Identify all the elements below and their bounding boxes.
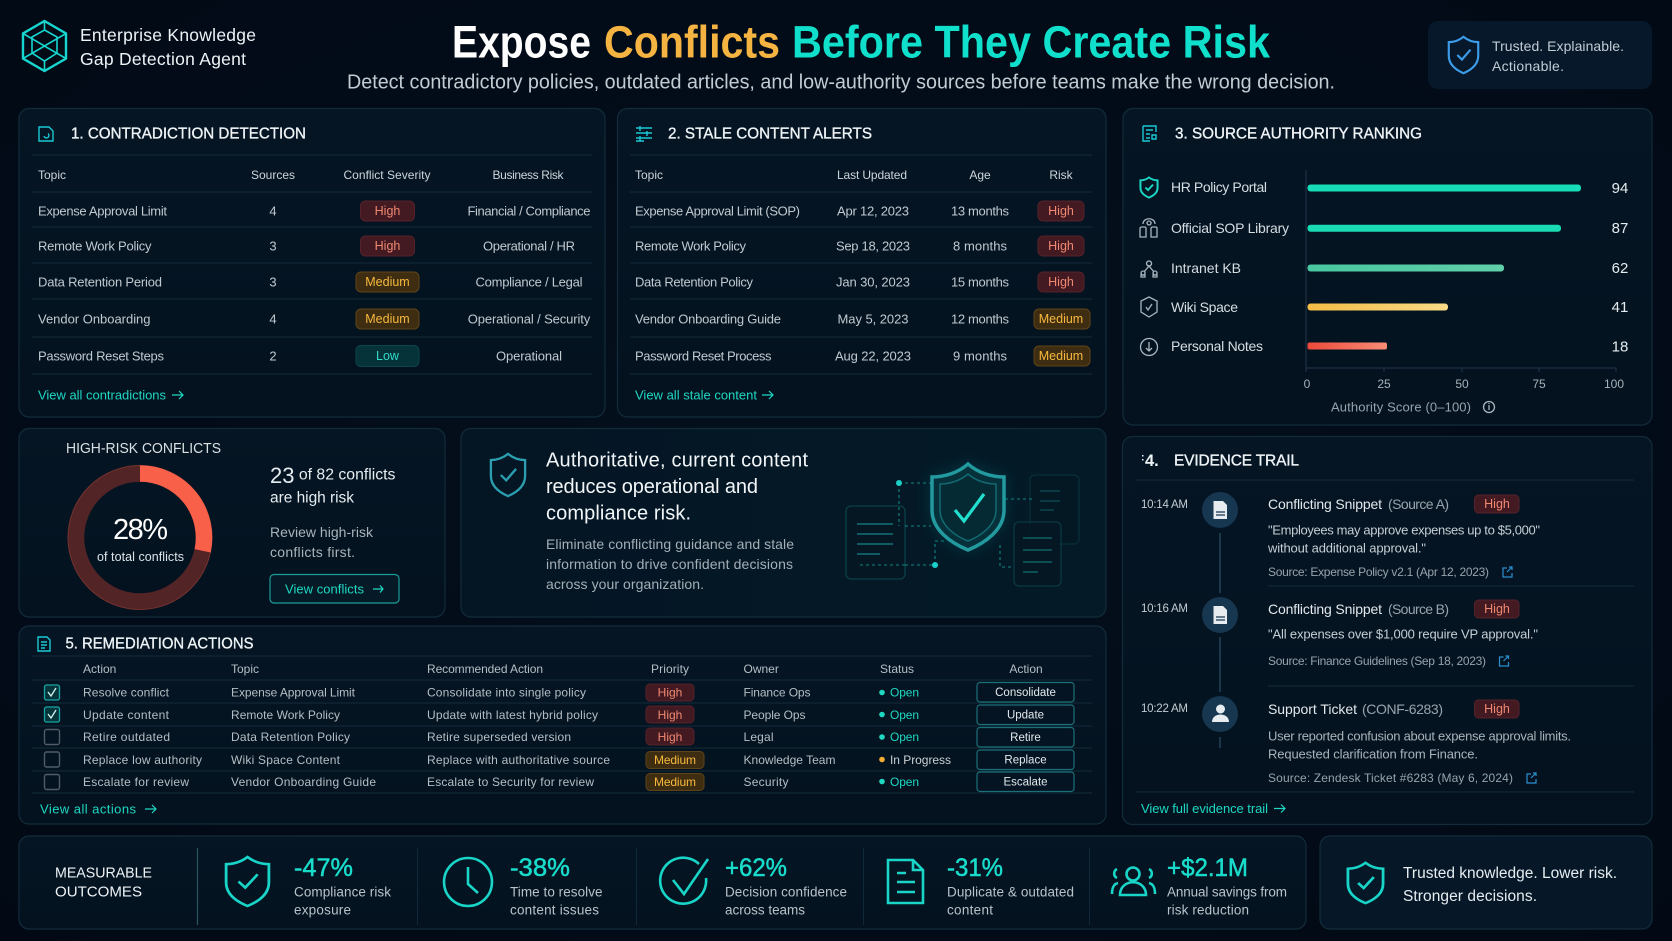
outcome: compliance risk: Compliance risk bbox=[294, 884, 391, 900]
outcome: duplicate content: content bbox=[947, 902, 993, 918]
row: escalate for review bbox=[44, 772, 1074, 792]
evidence: support ticket: User reported confusion about expense approval limits. bbox=[1268, 728, 1571, 744]
row: replace low authority: Replace with authoritative source bbox=[427, 753, 610, 767]
table header: Action bbox=[1009, 662, 1043, 676]
heading: 5. REMEDIATION ACTIONS bbox=[66, 636, 254, 652]
outcome: time to resolve: Time to resolve bbox=[510, 884, 602, 900]
row: remote work policy: High bbox=[375, 239, 400, 253]
statement text: Stronger decisions. bbox=[1403, 888, 1537, 905]
heading: 2. STALE CONTENT ALERTS bbox=[668, 126, 872, 142]
row: retire outdated: Open bbox=[890, 730, 919, 744]
source: HR Policy Portal: 94 bbox=[1612, 180, 1628, 197]
table header bbox=[38, 168, 564, 182]
badge: trusted: Trusted. Explainable. bbox=[1492, 38, 1624, 54]
link: View all contradictions bbox=[38, 388, 166, 402]
row: Data Retention Policy bbox=[635, 274, 754, 290]
table header bbox=[635, 168, 1074, 182]
message body bbox=[546, 536, 794, 592]
row: Jan 30, 2023 bbox=[836, 274, 910, 290]
title: Conflicts bbox=[604, 16, 780, 68]
message body: information to drive confident decisions bbox=[546, 556, 793, 572]
stat text: are high risk bbox=[270, 490, 354, 506]
message body: across your organization. bbox=[546, 576, 704, 592]
outcome: decision confidence: across teams bbox=[725, 902, 805, 918]
heading: 3. SOURCE AUTHORITY RANKING bbox=[1175, 126, 1422, 142]
title: Expose bbox=[452, 16, 591, 68]
table header: Risk bbox=[1049, 168, 1074, 182]
icon: shield bbox=[1348, 863, 1383, 903]
source: Official SOP Library: Official SOP Library bbox=[1171, 220, 1289, 236]
outcome: time to resolve bbox=[444, 854, 602, 918]
row: 9 months bbox=[953, 348, 1008, 364]
donut chart: of total conflicts bbox=[97, 550, 184, 564]
donut chart bbox=[68, 466, 212, 610]
heading: EVIDENCE TRAIL bbox=[1174, 452, 1299, 470]
row: retire outdated: Legal bbox=[744, 730, 774, 744]
row: replace low authority: Knowledge Team bbox=[744, 753, 836, 767]
panel: contradiction detection bbox=[19, 108, 605, 417]
table header: Last Updated bbox=[837, 168, 907, 182]
outcome: annual savings bbox=[1112, 854, 1287, 918]
label bbox=[55, 864, 152, 900]
row: Sep 18, 2023 bbox=[836, 238, 910, 254]
source: Personal Notes bbox=[1140, 338, 1628, 356]
table header: Topic bbox=[635, 168, 663, 182]
row: expense approval limit bbox=[38, 201, 590, 221]
row: 12 months bbox=[951, 312, 1010, 326]
icon: list bbox=[1143, 126, 1156, 141]
icon: shield bbox=[491, 454, 525, 496]
row: remote work policy bbox=[38, 236, 575, 256]
message heading bbox=[546, 450, 808, 524]
panel: source authority ranking bbox=[1123, 108, 1652, 425]
source: Wiki Space: 41 bbox=[1612, 299, 1628, 316]
evidence: source A: High bbox=[1484, 497, 1510, 511]
evidence: source B: 10:16 AM bbox=[1141, 603, 1188, 615]
source: Wiki Space bbox=[1141, 297, 1628, 317]
panel: high-risk conflicts bbox=[19, 428, 445, 617]
row: update content: Update with latest hybrid policy bbox=[427, 708, 598, 722]
row: Medium bbox=[1039, 312, 1083, 326]
outcome: compliance risk: exposure bbox=[294, 902, 351, 918]
row: resolve conflict: Open bbox=[890, 686, 919, 700]
evidence: source B: (Source B) bbox=[1388, 601, 1449, 617]
panel: evidence trail bbox=[1122, 436, 1652, 824]
row: retire outdated: High bbox=[658, 730, 682, 744]
evidence: source B: Conflicting Snippet bbox=[1268, 601, 1382, 617]
row: update content bbox=[44, 705, 1074, 724]
row: Medium bbox=[1039, 349, 1083, 363]
row: vendor onboarding: 4 bbox=[269, 312, 277, 326]
row: remote work policy: Remote Work Policy bbox=[38, 238, 152, 254]
row: data retention period bbox=[38, 272, 583, 292]
logo text bbox=[80, 25, 256, 69]
logo icon bbox=[23, 21, 66, 71]
outcome: duplicate content: Duplicate & outdated bbox=[947, 884, 1074, 900]
icon: sliders bbox=[636, 126, 652, 141]
evidence: support ticket: 10:22 AM bbox=[1141, 703, 1188, 715]
link: View full evidence trail bbox=[1141, 801, 1268, 816]
heading: HIGH-RISK CONFLICTS bbox=[66, 441, 221, 457]
icon: document bbox=[38, 637, 50, 651]
heading: 1. CONTRADICTION DETECTION bbox=[71, 126, 306, 142]
title bbox=[452, 16, 1271, 68]
row: Remote Work Policy bbox=[635, 238, 746, 254]
title: Before They Create Risk bbox=[792, 16, 1271, 68]
source: Wiki Space: Wiki Space bbox=[1171, 299, 1238, 315]
axis labels: Authority Score (0–100) bbox=[1331, 400, 1471, 414]
row: Vendor Onboarding Guide bbox=[635, 312, 781, 326]
row: password reset steps: Operational bbox=[496, 348, 562, 364]
row: retire outdated: Retire outdated bbox=[83, 730, 170, 744]
evidence: source A: Source: Expense Policy v2.1 (Apr 12, 2023) bbox=[1268, 565, 1489, 579]
stat text: 23 of 82 conflicts bbox=[270, 462, 396, 488]
row: update content: Update content bbox=[83, 708, 170, 722]
outcome: decision confidence: +62% bbox=[725, 854, 787, 882]
panel: closing statement bbox=[1320, 836, 1652, 929]
row: 15 months bbox=[951, 274, 1010, 290]
row: expense approval limit: 4 bbox=[269, 204, 277, 218]
button: View conflicts bbox=[285, 582, 364, 596]
link: View all actions bbox=[40, 802, 136, 816]
row: replace low authority: In Progress bbox=[890, 753, 951, 767]
row: password reset steps: Password Reset Steps bbox=[38, 348, 164, 364]
row: escalate for review: Escalate for review bbox=[83, 775, 189, 789]
row: escalate for review: Medium bbox=[654, 775, 696, 789]
row: vendor onboarding: Operational / Security bbox=[468, 312, 591, 326]
heading: 4. bbox=[1145, 452, 1159, 470]
stat text bbox=[270, 462, 396, 560]
subtitle: Detect contradictory policies, outdated articles, and low-authority sources before teams make the wrong decision. bbox=[347, 70, 1335, 94]
row: escalate for review: Open bbox=[890, 775, 919, 789]
row: resolve conflict: Finance Ops bbox=[744, 686, 810, 700]
row bbox=[635, 236, 1084, 256]
donut chart: 28% bbox=[113, 514, 168, 546]
evidence: source B: Source: Finance Guidelines (Sep 18, 2023) bbox=[1268, 654, 1486, 668]
source: Intranet KB: Intranet KB bbox=[1171, 260, 1241, 276]
row: 13 months bbox=[951, 204, 1010, 218]
label: OUTCOMES bbox=[55, 884, 142, 900]
row: update content: People Ops bbox=[744, 708, 806, 722]
row: escalate for review: Escalate bbox=[1003, 776, 1048, 788]
row: vendor onboarding: Medium bbox=[365, 312, 410, 326]
row bbox=[635, 201, 1084, 221]
row: 8 months bbox=[953, 238, 1008, 254]
row: update content: Open bbox=[890, 708, 919, 722]
row: replace low authority: Medium bbox=[654, 753, 696, 767]
row: replace low authority: Replace bbox=[1004, 754, 1047, 766]
outcome: duplicate content bbox=[888, 854, 1074, 918]
source: Intranet KB bbox=[1141, 260, 1628, 277]
row: data retention period: Data Retention Period bbox=[38, 274, 162, 290]
evidence: source B: High bbox=[1484, 602, 1510, 616]
table header: Age bbox=[969, 168, 991, 182]
row: vendor onboarding bbox=[38, 309, 591, 329]
table header: Topic bbox=[38, 168, 66, 182]
axis labels bbox=[1304, 377, 1624, 414]
panel: remediation actions bbox=[19, 626, 1106, 824]
row: High bbox=[1048, 204, 1074, 218]
row: update content: Remote Work Policy bbox=[231, 708, 340, 722]
table header: Sources bbox=[251, 168, 295, 182]
outcome: annual savings: risk reduction bbox=[1167, 902, 1249, 918]
row: May 5, 2023 bbox=[838, 312, 908, 326]
row: remote work policy: 3 bbox=[269, 238, 277, 254]
row bbox=[635, 346, 1090, 366]
row: password reset steps: 2 bbox=[269, 348, 277, 364]
row: password reset steps: Low bbox=[376, 349, 400, 363]
row: data retention period: Medium bbox=[365, 275, 410, 289]
outcome: annual savings: Annual savings from bbox=[1167, 884, 1287, 900]
row: resolve conflict: Consolidate bbox=[995, 687, 1056, 699]
panel: stale content alerts bbox=[618, 108, 1106, 417]
table header: Conflict Severity bbox=[344, 168, 430, 182]
row: password reset steps bbox=[38, 346, 562, 366]
stat text: conflicts first. bbox=[270, 544, 355, 560]
illustration: shield and documents bbox=[846, 462, 1079, 586]
row: escalate for review: Vendor Onboarding Guide bbox=[231, 775, 376, 789]
table header: Business Risk bbox=[492, 168, 564, 182]
panel: key message bbox=[461, 428, 1106, 617]
badge: trusted: Actionable. bbox=[1492, 58, 1564, 74]
evidence: support ticket: (CONF-6283) bbox=[1362, 701, 1443, 717]
source: Intranet KB: 62 bbox=[1612, 260, 1628, 277]
source: Personal Notes: Personal Notes bbox=[1171, 338, 1263, 354]
evidence: source A: Conflicting Snippet bbox=[1268, 496, 1382, 512]
panel: measurable outcomes bbox=[19, 836, 1306, 929]
outcome: time to resolve: -38% bbox=[510, 854, 570, 882]
outcome: annual savings: +$2.1M bbox=[1167, 854, 1248, 882]
badge: trusted bbox=[1428, 21, 1652, 89]
row: resolve conflict: Expense Approval Limit bbox=[231, 686, 356, 700]
row: resolve conflict: Resolve conflict bbox=[83, 686, 170, 700]
row: escalate for review: Escalate to Security for review bbox=[427, 775, 594, 789]
row: High bbox=[1048, 239, 1074, 253]
outcome: decision confidence bbox=[660, 854, 847, 918]
row: update content: Update bbox=[1007, 709, 1044, 721]
table header: Status bbox=[880, 662, 914, 676]
evidence: support ticket bbox=[1141, 696, 1571, 785]
evidence: source A: (Source A) bbox=[1388, 496, 1449, 512]
row: resolve conflict: Consolidate into single policy bbox=[427, 686, 586, 700]
row: vendor onboarding: Vendor Onboarding bbox=[38, 312, 150, 326]
row: resolve conflict bbox=[44, 682, 1074, 702]
axis labels: 75 bbox=[1532, 377, 1546, 391]
evidence: support ticket: High bbox=[1484, 702, 1510, 716]
label: MEASURABLE bbox=[55, 864, 152, 882]
source: Official SOP Library bbox=[1140, 219, 1628, 237]
row: expense approval limit: Expense Approval Limit bbox=[38, 204, 167, 218]
outcome: compliance risk bbox=[226, 854, 391, 918]
row: update content: High bbox=[658, 708, 682, 722]
row: High bbox=[1048, 275, 1074, 289]
row bbox=[635, 272, 1084, 292]
row: expense approval limit: Financial / Compliance bbox=[468, 204, 590, 218]
table header: Recommended Action bbox=[427, 662, 543, 676]
evidence: support ticket: Requested clarification from Finance. bbox=[1268, 746, 1478, 762]
statement text bbox=[1403, 865, 1617, 905]
row: replace low authority: Wiki Space Content bbox=[231, 753, 341, 767]
logo text: Gap Detection Agent bbox=[80, 49, 246, 69]
row: replace low authority bbox=[44, 750, 1074, 770]
axis labels: 25 bbox=[1377, 377, 1391, 391]
source: HR Policy Portal bbox=[1140, 177, 1628, 198]
evidence: source B bbox=[1141, 597, 1538, 668]
row: Aug 22, 2023 bbox=[835, 348, 911, 364]
row: data retention period: Compliance / Legal bbox=[476, 274, 583, 290]
timeline connector bbox=[1219, 533, 1221, 748]
table header: Action bbox=[83, 662, 116, 676]
bar chart bbox=[1140, 170, 1628, 414]
table header: Priority bbox=[651, 662, 689, 676]
statement text: Trusted knowledge. Lower risk. bbox=[1403, 865, 1617, 882]
evidence: source B: "All expenses over $1,000 require VP approval." bbox=[1268, 626, 1538, 642]
message body: Eliminate conflicting guidance and stale bbox=[546, 536, 794, 552]
evidence: support ticket: Support Ticket bbox=[1268, 701, 1357, 717]
outcome: time to resolve: content issues bbox=[510, 902, 599, 918]
stat text: Review high-risk bbox=[270, 524, 374, 540]
evidence: source A: 10:14 AM bbox=[1141, 499, 1188, 511]
outcome: duplicate content: -31% bbox=[947, 854, 1003, 882]
source: HR Policy Portal: HR Policy Portal bbox=[1171, 179, 1267, 195]
logo text: Enterprise Knowledge bbox=[80, 25, 256, 45]
message heading: reduces operational and bbox=[546, 476, 758, 498]
row: replace low authority: Replace low authority bbox=[83, 753, 202, 767]
icon: document bbox=[39, 127, 53, 141]
source: Official SOP Library: 87 bbox=[1612, 220, 1628, 237]
table header: Topic bbox=[231, 662, 259, 676]
evidence: source A bbox=[1141, 492, 1540, 579]
row: Expense Approval Limit (SOP) bbox=[635, 204, 800, 218]
evidence: source A: "Employees may approve expenses up to $5,000" bbox=[1268, 522, 1540, 538]
row: remote work policy: Operational / HR bbox=[483, 238, 575, 254]
row bbox=[635, 309, 1090, 329]
row: retire outdated: Retire superseded version bbox=[427, 730, 571, 744]
table header bbox=[83, 662, 1043, 676]
row: Password Reset Process bbox=[635, 348, 772, 364]
table header: Owner bbox=[744, 662, 779, 676]
message heading: Authoritative, current content bbox=[546, 450, 808, 472]
row: retire outdated: Data Retention Policy bbox=[231, 730, 350, 744]
message heading: compliance risk. bbox=[546, 502, 691, 524]
row: resolve conflict: High bbox=[658, 686, 682, 700]
axis labels: 100 bbox=[1604, 377, 1624, 391]
source: Personal Notes: 18 bbox=[1612, 338, 1628, 356]
evidence: support ticket: Source: Zendesk Ticket #6283 (May 6, 2024) bbox=[1268, 771, 1513, 785]
evidence: source A: without additional approval." bbox=[1267, 540, 1426, 556]
outcome: decision confidence: Decision confidence bbox=[725, 884, 847, 900]
axis labels: 0 bbox=[1304, 377, 1311, 391]
link: View all stale content bbox=[635, 388, 757, 402]
axis labels: 50 bbox=[1455, 377, 1469, 391]
row: escalate for review: Security bbox=[744, 775, 788, 789]
row: retire outdated: Retire bbox=[1010, 732, 1041, 744]
row: data retention period: 3 bbox=[269, 274, 277, 290]
row: Apr 12, 2023 bbox=[837, 204, 909, 218]
outcome: compliance risk: -47% bbox=[294, 854, 353, 882]
row: expense approval limit: High bbox=[375, 204, 400, 218]
row: retire outdated bbox=[44, 728, 1074, 747]
button bbox=[270, 574, 399, 603]
